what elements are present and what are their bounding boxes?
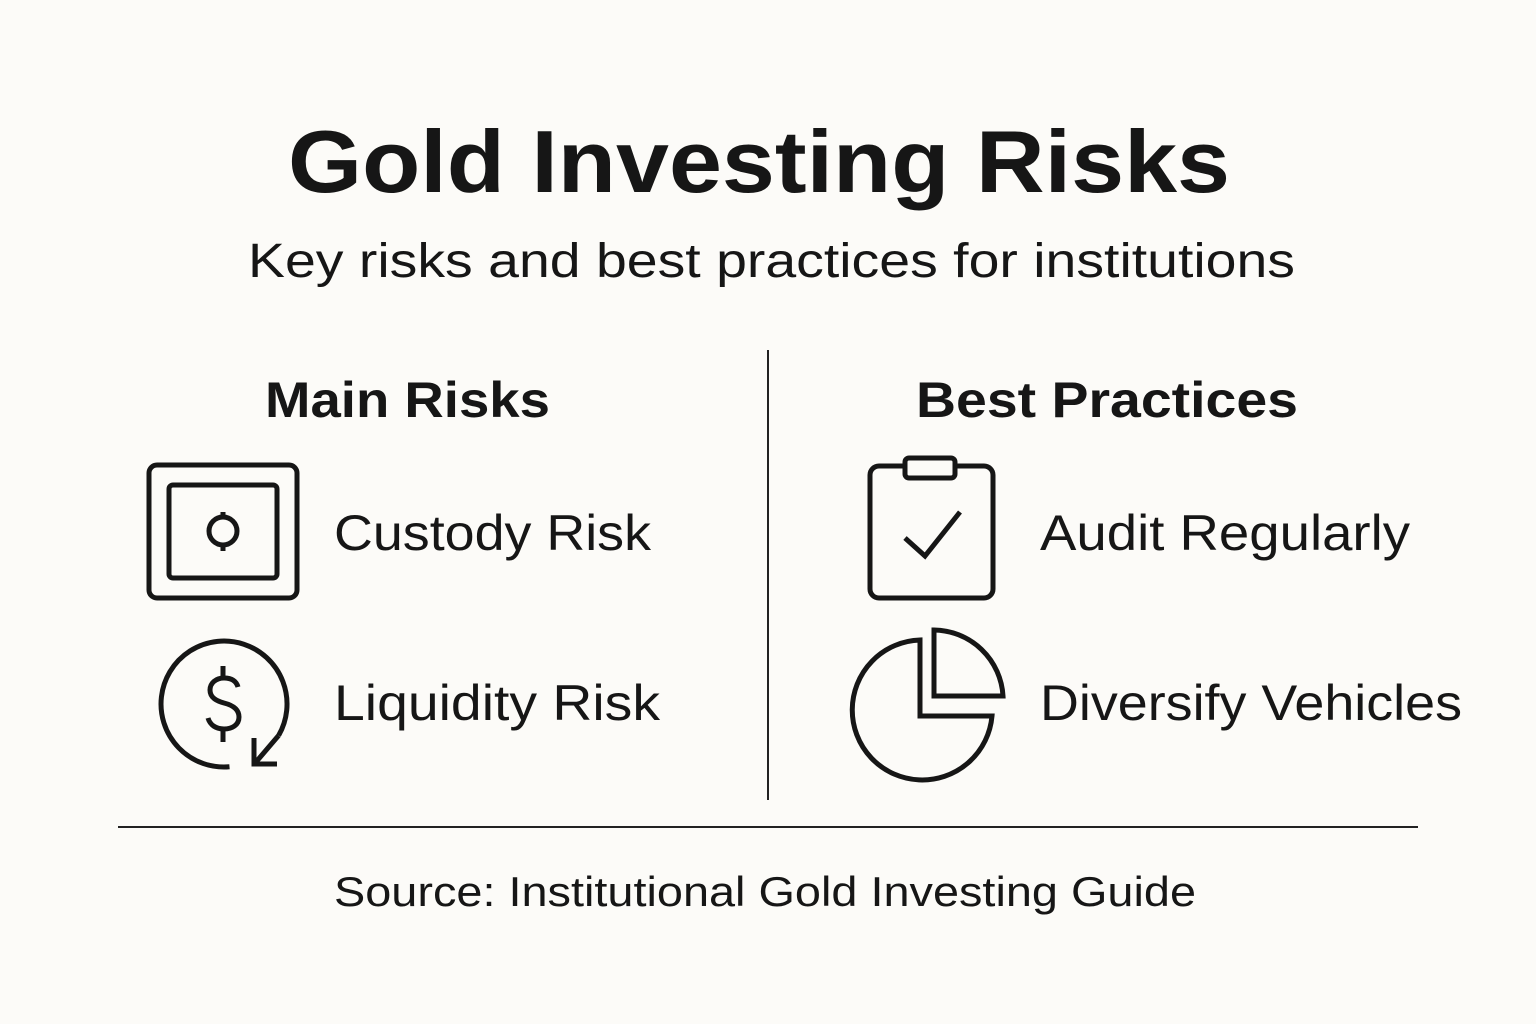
text: custody risk: Custody Risk [334, 505, 652, 561]
text: liquidity risk: Liquidity Risk [334, 675, 661, 731]
text: diversify vehicles: Diversify Vehicles [1040, 675, 1462, 731]
text: audit regularly: Audit Regularly [1040, 505, 1410, 561]
heading: best practices: Best Practices [916, 372, 1298, 428]
heading: main risks: Main Risks [265, 372, 550, 428]
panel: main risks [149, 372, 661, 767]
icon: pie chart [852, 630, 1003, 780]
title: Gold Investing Risks [288, 112, 1230, 211]
panel: best practices [852, 372, 1462, 780]
icon: clipboard [870, 458, 993, 598]
icon: safe [149, 465, 297, 598]
source: Source: Institutional Gold Investing Guide [334, 868, 1196, 915]
icon: liquidity dollar [161, 641, 287, 767]
subtitle: Key risks and best practices for institutions [248, 235, 1295, 288]
